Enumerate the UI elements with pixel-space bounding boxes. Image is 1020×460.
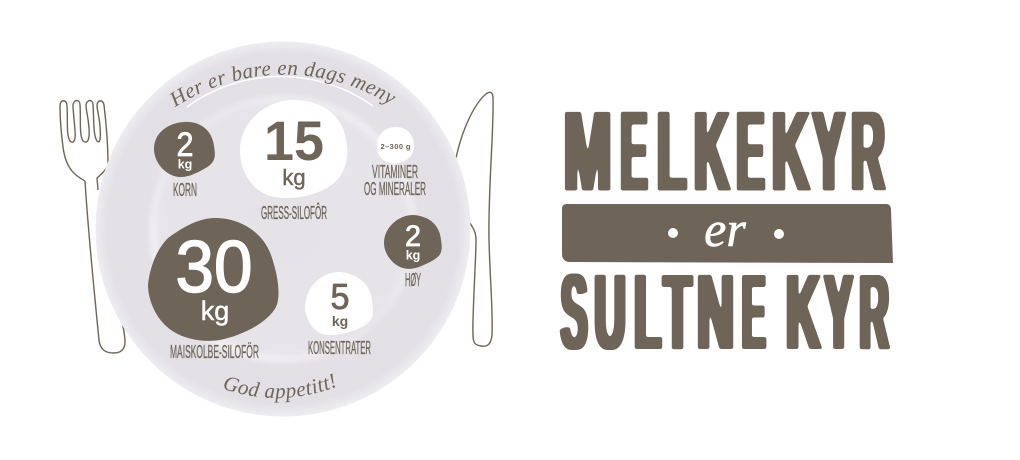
food portion: hoy: 2 <box>405 220 421 253</box>
icon: fork <box>60 100 125 353</box>
banner word: er: er <box>704 201 746 257</box>
food portion: gress-silofor <box>240 100 347 223</box>
title line: sultne kyr: E <box>742 252 765 372</box>
title line: melkekyr: E <box>736 88 764 216</box>
title line: melkekyr: M <box>564 88 612 216</box>
food portion: korn: 2 <box>176 126 194 164</box>
panel: plate: OG MINERALER <box>364 179 426 199</box>
title line: melkekyr: K <box>772 88 809 215</box>
food portion: konsentrater <box>305 272 373 358</box>
food portion: korn: KORN <box>173 180 197 200</box>
title line: melkekyr <box>564 88 885 216</box>
food portion: vitaminer og mineraler: VITAMINER <box>372 162 418 182</box>
food portion: maiskolbe-silofor: MAISKOLBE-SILOFÖR <box>170 342 259 362</box>
curved greeting text: God appetitt! <box>224 374 335 403</box>
title line: melkekyr: Y <box>812 88 845 215</box>
food portion: maiskolbe-silofor: 30 <box>176 227 252 308</box>
title line: melkekyr: R <box>851 88 885 215</box>
title line: melkekyr: K <box>694 88 729 215</box>
panel: plate: KONSENTRATER <box>308 338 371 358</box>
title: melkekyr er sultne kyr <box>561 88 893 373</box>
title line: sultne kyr: K <box>786 252 820 372</box>
title line: sultne kyr: T <box>664 253 691 372</box>
food portion: konsentrater: kg <box>332 313 348 329</box>
title line: sultne kyr: L <box>634 253 661 373</box>
title line: sultne kyr: S <box>561 253 587 373</box>
food portion: vitaminer og mineraler: 2–300 g <box>380 142 411 151</box>
food portion: maiskolbe-silofor: kg <box>201 296 229 326</box>
title line: sultne kyr: Y <box>824 253 853 373</box>
food portion: hoy: kg <box>406 248 420 262</box>
food portion: korn: kg <box>178 158 192 172</box>
heading: curved menu text: Her er bare en dags meny <box>170 62 396 108</box>
food portion: korn <box>154 122 215 200</box>
food portion: hoy <box>384 215 442 290</box>
food portion: gress-silofor: 15 <box>264 109 324 172</box>
panel: plate <box>96 42 470 416</box>
food portion: konsentrater: 5 <box>330 276 350 317</box>
title line: sultne kyr: U <box>594 253 626 373</box>
banner dots <box>668 228 784 239</box>
title line: sultne kyr: N <box>697 252 734 372</box>
plate rim highlight <box>187 76 373 107</box>
food portion: hoy: HØY <box>405 270 421 290</box>
food portion: gress-silofor: GRESS-SILOFÔR <box>261 202 327 223</box>
food portion: maiskolbe-silofor <box>148 218 279 362</box>
title line: melkekyr: E <box>621 89 647 216</box>
title line: melkekyr: L <box>657 88 686 215</box>
banner <box>562 204 893 263</box>
title line: sultne kyr <box>561 252 889 373</box>
food portion: gress-silofor: kg <box>282 165 306 190</box>
title line: sultne kyr: R <box>860 252 889 373</box>
icon: knife <box>456 92 493 346</box>
food portion: vitaminer og mineraler <box>364 127 426 199</box>
